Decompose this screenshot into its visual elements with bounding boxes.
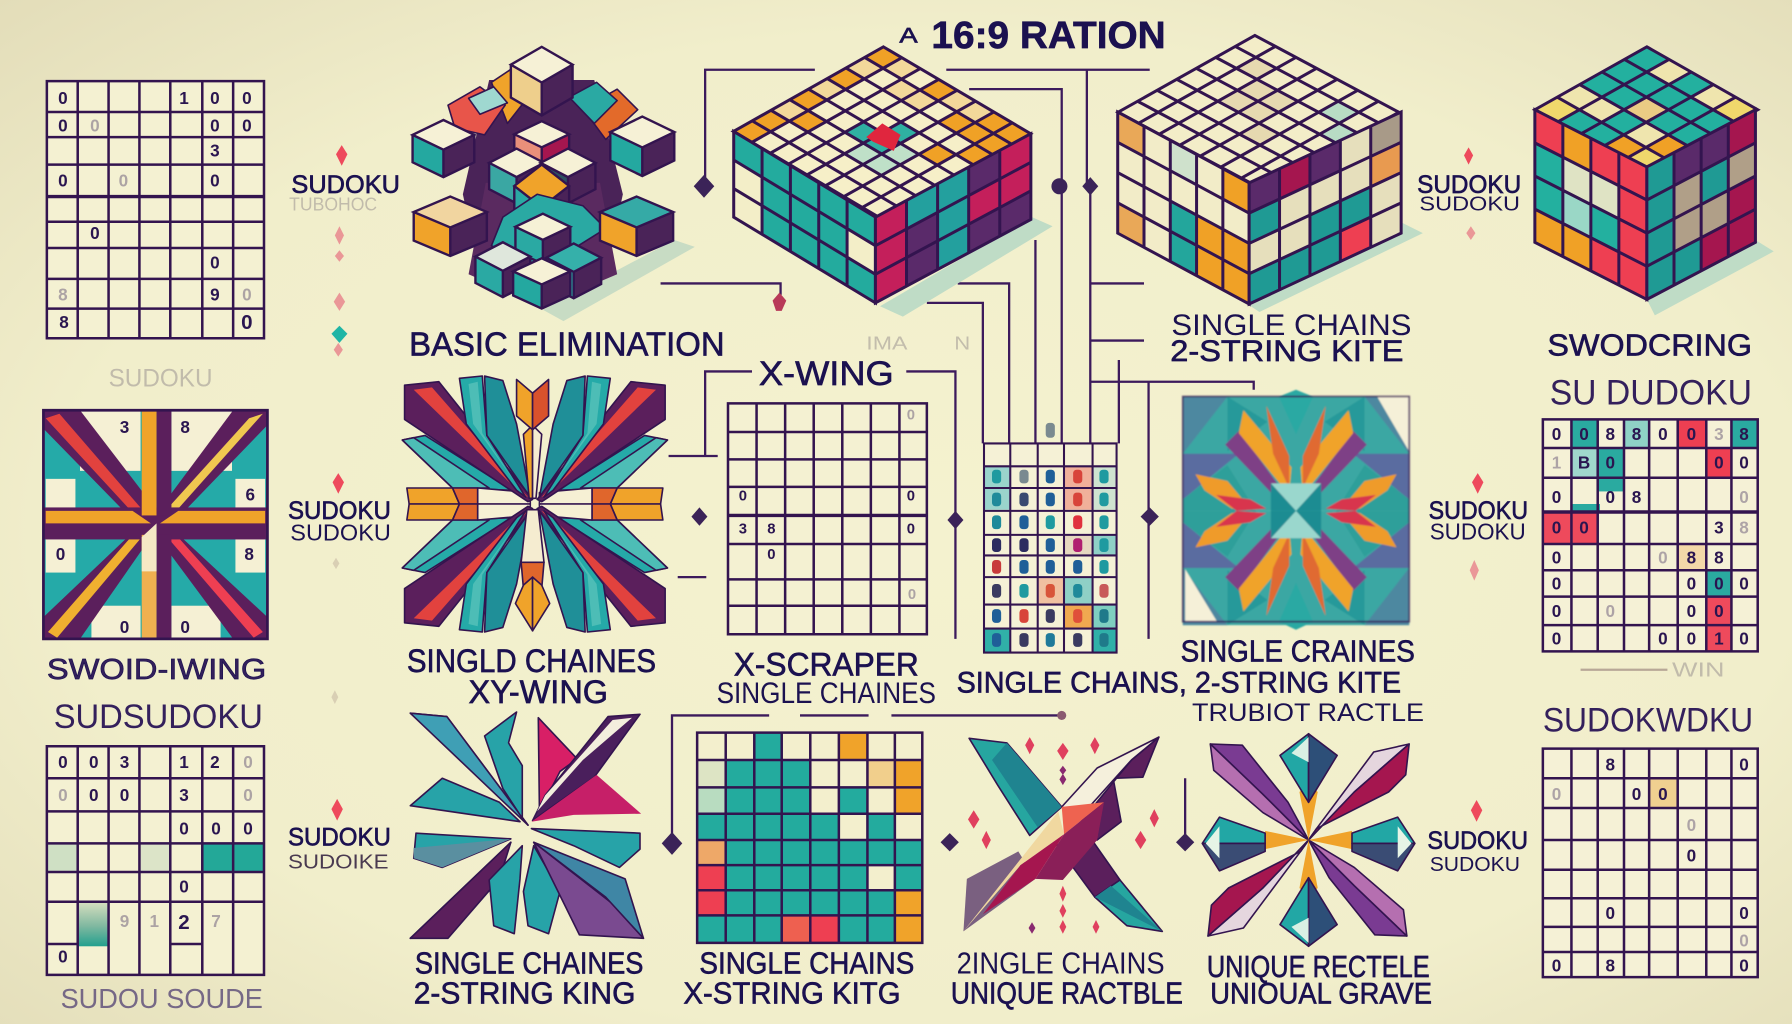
panel: sudoku grid right top: 0 [1687, 424, 1696, 444]
text labels: SINGLE CHAINS [699, 946, 914, 981]
panel: sudoku grid bottom left: 3 [179, 785, 189, 805]
panel: sudoku grid right top [1543, 419, 1758, 653]
panel: kaleidoscope star [1183, 390, 1409, 630]
panel: teal colored grid [697, 733, 922, 943]
panel: sudoku grid bottom right: 0 [1658, 784, 1668, 804]
text labels: X-WING [759, 355, 894, 393]
panel: sudoku grid bottom right: 0 [1739, 754, 1749, 774]
icon: red marker [866, 123, 901, 151]
text labels: N [954, 333, 970, 354]
panel: sudoku grid right top: 0 [1552, 601, 1561, 621]
panel: x pattern tile with digits: 6 [246, 485, 255, 505]
text labels: SINGLE CHAINS [1171, 309, 1411, 342]
panel: sudoku grid right top: 8 [1739, 424, 1749, 444]
panel: isometric grid block two [733, 47, 1031, 303]
panel: sudoku grid top left: 0 [210, 88, 220, 108]
text labels: UNIQUE RECTELE [1207, 949, 1430, 984]
right face [1249, 112, 1401, 304]
text labels: SWOID-IWING [47, 654, 266, 686]
text labels: SUDOKU [291, 171, 400, 199]
panel: tall token grid [984, 423, 1117, 653]
panel: sudoku grid top left: 0 [210, 253, 220, 273]
panel: sudoku grid right top: 0 [1606, 487, 1615, 507]
right face [1647, 110, 1755, 299]
panel: sudoku grid right top: 0 [1552, 424, 1561, 444]
text labels: SINGLD CHAINES [407, 643, 656, 679]
panel: sudoku grid bottom right: 0 [1606, 903, 1615, 923]
panel: sudoku grid right top: 0 [1739, 487, 1749, 507]
panel: x pattern tile with digits: 0 [56, 544, 65, 564]
text labels: SUDOKU [1429, 497, 1528, 525]
panel: sudoku grid top left: 0 [210, 170, 220, 190]
text labels: SWODCRING [1547, 327, 1752, 362]
panel: sudoku grid right top: 0 [1552, 629, 1561, 649]
panel: sudoku grid bottom left: 9 [120, 911, 129, 931]
panel: sudoku grid top left [47, 81, 264, 338]
text labels: SUDOKU [290, 520, 391, 546]
panel: sudoku grid bottom right: 0 [1739, 930, 1749, 950]
panel: sudoku grid bottom right: 8 [1606, 955, 1615, 975]
panel: sudoku grid top left: 0 [242, 285, 252, 305]
panel: sudoku grid right top: 0 [1739, 574, 1749, 594]
panel: sudoku grid bottom left: 0 [179, 818, 189, 838]
left face [1535, 110, 1647, 299]
iso shadow: block four [1647, 240, 1774, 315]
panel: sudoku grid top left: 0 [119, 170, 128, 190]
panel: x pattern tile with digits: 0 [180, 617, 190, 637]
panel: sudoku grid top left: 0 [242, 115, 252, 135]
panel: eight petal star [1202, 734, 1415, 946]
text labels: SUDSUDOKU [54, 698, 263, 736]
title: 16:9 RATION [931, 14, 1166, 56]
text labels: TRUBIOT RACTLE [1192, 699, 1424, 727]
title: A [899, 22, 918, 47]
panel: sudoku grid bottom right: 0 [1552, 955, 1561, 975]
panel: x-wing sudoku grid: 0 [767, 547, 776, 563]
panel: x-wing sudoku grid: 0 [907, 407, 915, 423]
top face [1118, 35, 1399, 189]
panel: x shape with diamonds [963, 737, 1162, 934]
panel: sudoku grid right top: 8 [1606, 424, 1615, 444]
text labels: SUDOKU [1427, 827, 1528, 855]
panel: x-wing sudoku grid: 0 [907, 522, 915, 538]
top face [1535, 47, 1758, 173]
panel: sudoku grid bottom left: 0 [179, 877, 189, 897]
panel: x pattern tile with digits [43, 410, 267, 639]
text labels: XY-WING [469, 674, 608, 710]
text labels [47, 171, 1753, 1014]
panel: isometric grid block three [1118, 35, 1401, 304]
panel: sudoku grid bottom left: 7 [211, 911, 221, 931]
panel: sudoku grid right top: B [1578, 453, 1590, 473]
text labels: SUDOKU [1417, 171, 1521, 199]
panel: sudoku grid right top: 0 [1552, 518, 1561, 538]
left face [734, 131, 875, 303]
panel: sudoku grid top left: 0 [242, 88, 252, 108]
text labels: UNIOUAL GRAVE [1210, 977, 1432, 1010]
panel: sudoku grid top left: 0 [90, 223, 100, 243]
panel: sudoku grid right top: 0 [1687, 629, 1696, 649]
panel: sudoku grid right top: 0 [1552, 574, 1561, 594]
text labels: X-STRING KITG [683, 975, 901, 1010]
panel: sudoku grid right top: 0 [1579, 518, 1589, 538]
text labels: SINGLE CRAINES [1181, 634, 1415, 669]
panel: x pattern tile with digits: 8 [244, 544, 254, 564]
panel: sudoku grid right top: 0 [1552, 547, 1561, 567]
connector lines and markers [331, 70, 1667, 855]
text labels: WIN [1672, 659, 1725, 682]
text labels: SUDOKU [1430, 518, 1526, 544]
panel: sudoku grid right top: 0 [1658, 547, 1668, 567]
panel: x pattern tile with digits: 3 [120, 417, 129, 437]
text labels: UNIQUE RACTBLE [951, 975, 1183, 1010]
panel: sudoku grid top left: 1 [179, 88, 189, 108]
panel: isometric stacked cubes [413, 47, 674, 309]
panel: sudoku grid right top: 0 [1739, 629, 1749, 649]
panel: sudoku grid right top: 0 [1687, 601, 1696, 621]
panel: sudoku grid top left: 0 [241, 311, 253, 334]
text labels: IMA [866, 333, 908, 354]
panel: sudoku grid bottom right [1543, 749, 1758, 977]
text labels: SUDOIKE [288, 851, 389, 874]
panel: sudoku grid top left: 0 [58, 88, 68, 108]
panel: sudoku grid right top: 8 [1632, 487, 1641, 507]
panel: x-wing sudoku grid [728, 403, 927, 634]
panel: sudoku grid right top: 8 [1632, 424, 1641, 444]
text labels: 2-STRING KITE [1170, 335, 1403, 368]
text labels: SUDOKU [288, 824, 391, 852]
text labels: SUDOKWDKU [1543, 701, 1753, 739]
top face [733, 47, 1031, 218]
panel: sudoku grid bottom left: 0 [243, 752, 253, 772]
panel: sudoku grid right top: 0 [1739, 453, 1749, 473]
panel: sudoku grid bottom left: 0 [243, 785, 253, 805]
panel: sudoku grid bottom right: 0 [1687, 846, 1696, 866]
panel: sudoku grid right top: 8 [1739, 518, 1749, 538]
panel: sudoku grid right top: 8 [1714, 547, 1724, 567]
panel: x-wing sudoku grid: 8 [767, 522, 776, 538]
panel: sudoku grid bottom left: 2 [210, 752, 220, 772]
panel: sudoku grid bottom left: 0 [243, 818, 253, 838]
text labels: SUDOU SOUDE [61, 983, 263, 1014]
panel: sudoku grid bottom left: 0 [89, 752, 98, 772]
panel: sudoku grid right top: 0 [1714, 601, 1724, 621]
panel: sudoku grid right top: 3 [1714, 518, 1724, 538]
panel: sudoku grid right top: 3 [1714, 424, 1724, 444]
panel: isometric grid block four [1535, 47, 1758, 299]
panel: sudoku grid bottom left: 1 [150, 911, 160, 931]
panel: sudoku grid right top: 0 [1579, 424, 1589, 444]
panel: x-wing sudoku grid: 0 [907, 489, 915, 505]
panel: sudoku grid bottom right: 8 [1606, 754, 1615, 774]
iso shadow: block one [543, 240, 695, 321]
left face [1118, 112, 1249, 304]
panel: sudoku grid bottom left: 0 [58, 752, 68, 772]
panel: x-wing star [402, 376, 667, 632]
panel: sudoku grid bottom left: 3 [120, 752, 129, 772]
panel: sudoku grid right top: 0 [1687, 574, 1696, 594]
text labels: SINGLE CHAINS, 2-STRING KITE [957, 667, 1401, 700]
text labels: X-SCRAPER [734, 646, 919, 682]
panel: sudoku grid top left: 8 [59, 312, 69, 332]
panel: x-wing sudoku grid: 0 [739, 489, 747, 505]
panel: sudoku grid bottom left: 2 [178, 911, 190, 934]
panel: sudoku grid bottom left: 1 [179, 752, 189, 772]
text labels: TUBOHOC [289, 193, 377, 214]
panel: sudoku grid bottom left: 0 [211, 818, 221, 838]
panel: sudoku grid top left: 0 [58, 115, 68, 135]
panel: sudoku grid right top: 0 [1658, 629, 1668, 649]
text labels: SUDOKU [109, 364, 213, 392]
panel: x-wing sudoku grid: 3 [739, 522, 747, 538]
panel: sudoku grid top left: 9 [210, 285, 220, 305]
text labels: SU DUDOKU [1550, 373, 1752, 413]
panel: sudoku grid bottom right: 0 [1739, 955, 1749, 975]
text labels: SUDOKU [1430, 853, 1520, 876]
panel: x pattern tile with digits: 0 [120, 617, 129, 637]
panel: sudoku grid right top: 0 [1658, 424, 1668, 444]
panel: sudoku grid bottom right: 0 [1687, 815, 1696, 835]
panel: sudoku grid right top: 0 [1552, 487, 1561, 507]
panel: x pattern tile with digits: 8 [180, 417, 190, 437]
text labels: SINGLE CHAINES [717, 677, 936, 710]
icon: small diamonds [968, 737, 1159, 934]
text labels: SINGLE CHAINES [415, 946, 643, 981]
panel: sudoku grid top left: 3 [210, 141, 220, 161]
panel: x-wing sudoku grid: 0 [908, 587, 916, 603]
iso shadow: block two [880, 217, 1053, 317]
panel: sudoku grid right top: 0 [1606, 601, 1615, 621]
iso shadow: block three [1249, 223, 1423, 312]
panel: x star with teal and magenta petals [410, 712, 643, 938]
panel: sudoku grid top left: 0 [58, 170, 68, 190]
panel: sudoku grid bottom left: 0 [58, 946, 68, 966]
text labels: BASIC ELIMINATION [409, 326, 725, 363]
panel: sudoku grid right top: 1 [1552, 453, 1562, 473]
panel: sudoku grid right top: 0 [1606, 453, 1615, 473]
panel: sudoku grid right top: 8 [1687, 547, 1696, 567]
text labels: 2INGLE CHAINS [957, 946, 1165, 981]
panel: sudoku grid right top: 1 [1714, 629, 1724, 649]
panel: sudoku grid bottom left: 0 [58, 785, 68, 805]
panel: sudoku grid right top: 0 [1714, 453, 1724, 473]
panel: sudoku grid bottom right: 0 [1552, 784, 1561, 804]
panel: sudoku grid bottom left: 0 [120, 785, 129, 805]
right face [875, 134, 1031, 303]
text labels: SUDOKU [1419, 192, 1520, 215]
panel: sudoku grid bottom left [47, 746, 264, 975]
text labels: SUDOKU [288, 497, 391, 525]
panel: sudoku grid bottom right: 0 [1632, 784, 1641, 804]
panel: sudoku grid top left: 0 [210, 115, 220, 135]
panel: sudoku grid top left: 0 [90, 115, 100, 135]
panel: sudoku grid bottom left: 0 [89, 785, 98, 805]
panel: sudoku grid bottom right: 0 [1739, 903, 1749, 923]
panel: sudoku grid right top: 0 [1714, 574, 1724, 594]
panel: sudoku grid top left: 8 [58, 285, 68, 305]
text labels: 2-STRING KING [414, 975, 635, 1010]
